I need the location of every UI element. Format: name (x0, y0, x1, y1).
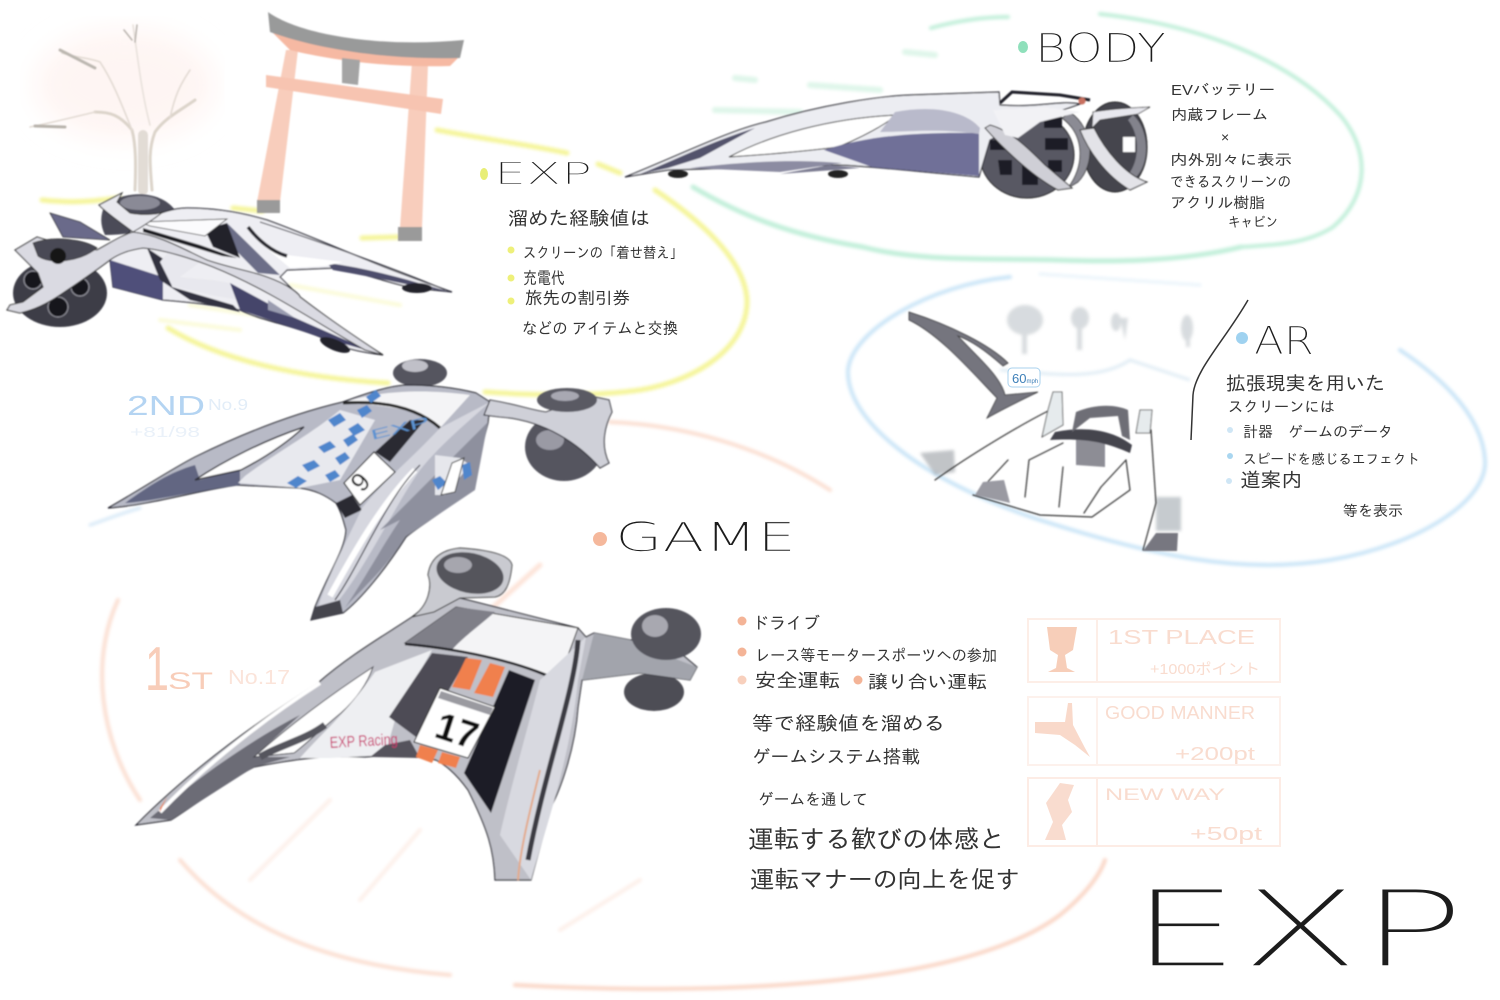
ranking label: 2nd: +81/98 (130, 424, 200, 441)
text block: game description: ゲームシステム搭載 (752, 747, 920, 767)
decoration: blue ar swoosh (90, 274, 1485, 565)
text block: body description (1170, 82, 1292, 230)
card: 1st place (1028, 619, 1280, 682)
divider line (1191, 300, 1248, 440)
logo: exp: EXP (1130, 868, 1465, 991)
text block: body description: 内蔵フレーム (1171, 107, 1268, 124)
text block: ar description: スピードを感じるエフェクト (1243, 451, 1420, 467)
text block: body description: 内外別々に表示 (1170, 152, 1292, 169)
heading: exp (480, 157, 592, 192)
text block: ar description: 拡張現実を用いた (1226, 373, 1385, 395)
decoration: yellow exp swoosh (42, 130, 747, 395)
icon: thumbs up (1035, 703, 1090, 757)
wheels (624, 673, 684, 711)
text block: game description: 安全運転 (755, 670, 840, 692)
chassis frame (7, 232, 383, 355)
heading: ar: AR (1254, 319, 1314, 363)
checker squares (287, 390, 472, 490)
race number plate: 9 (344, 467, 376, 497)
car: number 9 second place (108, 359, 612, 620)
ranking label: 1st: ST (168, 668, 213, 695)
text block: game description: 運転マナーの向上を促す (750, 867, 1020, 894)
body silhouette (625, 92, 1080, 177)
lower wheel (525, 413, 603, 481)
ranking label: 1st (145, 635, 290, 704)
illustration: hands and steering wheel (935, 392, 1178, 551)
heading: body: BODY (1035, 26, 1166, 72)
text block: exp description: 充電代 (523, 269, 565, 288)
rear top wheel (412, 548, 512, 617)
text block: exp description (508, 209, 683, 338)
car: number 17 first place (136, 546, 701, 880)
race number plate (344, 452, 395, 505)
text block: game description: ドライブ (752, 614, 820, 633)
race number plate (414, 688, 495, 758)
card: new way: NEW WAY (1105, 785, 1225, 804)
front arm (484, 396, 612, 468)
text block: ar description (1226, 373, 1420, 520)
text block: game description: 等で経験値を溜める (752, 714, 945, 735)
text block: exp description: 溜めた経験値は (508, 209, 650, 230)
heading: exp: EXP (494, 157, 592, 192)
text block: body description: EVバッテリー (1171, 82, 1275, 99)
illustration: road scenery (920, 305, 1193, 531)
card: good manner: +200pt (1175, 744, 1255, 764)
body silhouette (110, 208, 452, 355)
ranking label: 2nd: 2ND (127, 390, 205, 421)
text block: game description: 運転する歓びの体感と (748, 826, 1005, 854)
car: body side view (625, 92, 1150, 198)
text block: ar description: スクリーンには (1228, 399, 1335, 416)
side number plate (441, 458, 464, 495)
text block: game description (738, 614, 1020, 894)
card: good manner (1028, 697, 1280, 765)
illustration: torii gate (257, 12, 464, 241)
decoration: green body swoosh (693, 14, 1362, 261)
ranking label: 2nd: No.9 (208, 397, 248, 414)
card: 1st place: 1ST PLACE (1108, 627, 1255, 649)
card: 1st place: +1000ポイント (1150, 661, 1260, 678)
text block: body description: キャビン (1228, 214, 1278, 230)
panel: ar cockpit view (909, 300, 1248, 551)
illustration: cherry tree (30, 25, 215, 190)
text block: exp description: スクリーンの「着せ替え」 (523, 245, 683, 262)
wheels (101, 194, 175, 235)
upper frame arm (99, 193, 163, 232)
body silhouette (108, 385, 490, 620)
text block: body description: アクリル樹脂 (1170, 195, 1265, 212)
ranking label: 1st: No.17 (228, 667, 290, 689)
car: top-left exp racer (7, 193, 452, 356)
card: new way: +50pt (1190, 824, 1262, 844)
card: new way (1028, 778, 1280, 846)
front right arm (582, 633, 697, 680)
text block: body description: × (1221, 129, 1229, 145)
text block: game description: ゲームを通して (758, 791, 868, 809)
wheels (1083, 102, 1147, 192)
text block: game description: レース等モータースポーツへの参加 (755, 647, 997, 665)
text block: body description: できるスクリーンの (1170, 174, 1291, 191)
text block: exp description: などの アイテムと交換 (522, 321, 678, 338)
card: good manner: GOOD MANNER (1105, 703, 1255, 723)
race number plate: 17 (430, 705, 483, 758)
icon: trophy (1047, 627, 1077, 672)
chassis frame (985, 125, 1072, 190)
icon: person (1045, 783, 1074, 840)
text block: game description: 譲り合い運転 (868, 672, 987, 692)
team logo: EXP (369, 413, 431, 443)
text block: ar description: 等を表示 (1343, 503, 1403, 520)
hud: speed badge (1008, 368, 1040, 387)
ranking label: 2nd (127, 390, 248, 441)
text block: exp description: 旅先の割引券 (525, 289, 630, 308)
heading: ar (1236, 319, 1314, 363)
hud: speed badge: 60mph (1012, 371, 1038, 386)
body silhouette (136, 595, 697, 880)
team logo: EXP Racing (329, 731, 398, 752)
heading: game (593, 515, 796, 561)
text block: ar description: 計器 ゲームのデータ (1243, 424, 1393, 441)
heading: game: GAME (615, 515, 796, 561)
ranking label: 1st: 1 (145, 635, 169, 704)
illustration: windshield pillar (909, 312, 1038, 418)
text block: ar description: 道案内 (1240, 470, 1302, 492)
decoration: salmon game swoosh (102, 422, 1105, 989)
